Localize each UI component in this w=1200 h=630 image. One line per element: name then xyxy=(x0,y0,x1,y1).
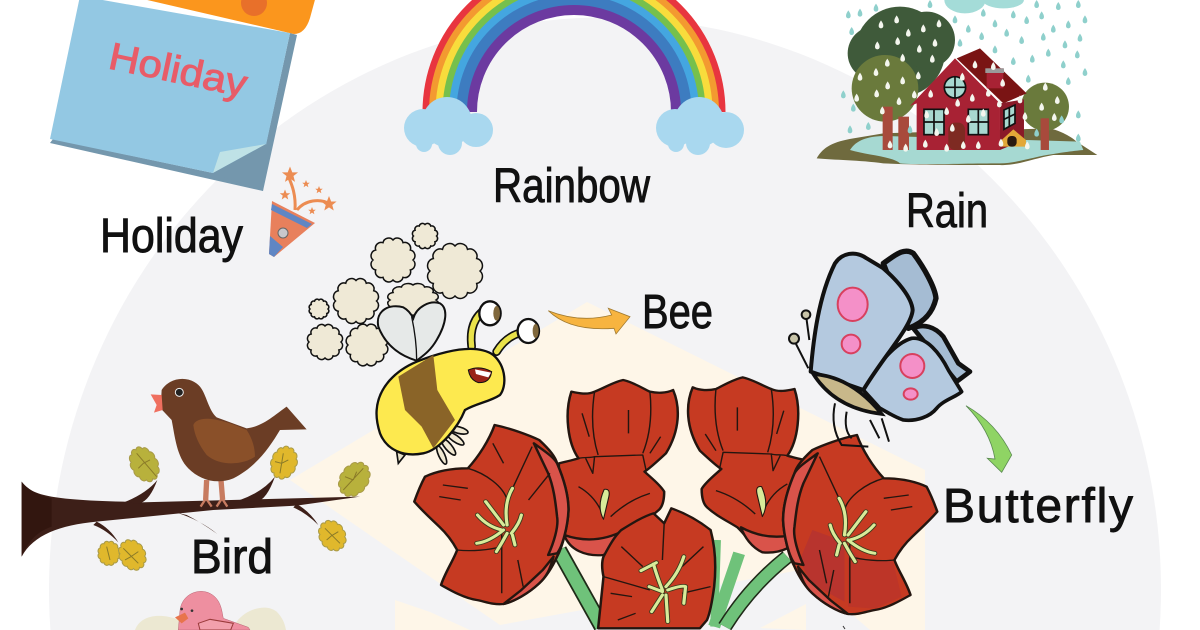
icon: party popper xyxy=(269,166,337,257)
small mark xyxy=(843,626,845,629)
label: Rainbow: Rainbow xyxy=(493,160,650,213)
illustration: bee xyxy=(376,301,539,465)
illustration: pollen puffs xyxy=(307,223,482,366)
calendar lettering: Holiday xyxy=(105,36,251,106)
label: Bee: Bee xyxy=(642,286,713,339)
icon: right cloud xyxy=(656,97,744,155)
label: Bird: Bird xyxy=(191,531,273,584)
label: Rain: Rain xyxy=(906,185,988,238)
flower: left tulip xyxy=(559,380,678,555)
label: Holiday: Holiday xyxy=(100,210,243,263)
icon: left cloud xyxy=(404,97,493,155)
illustration: bird on branch xyxy=(22,379,376,575)
illustration: rain and house xyxy=(817,0,1097,165)
flower: center bloom xyxy=(598,508,715,628)
arrow: to Butterfly xyxy=(966,406,1012,472)
illustration: pink bird xyxy=(135,591,286,630)
illustration: rainbow xyxy=(426,0,722,112)
label: Butterfly: Butterfly xyxy=(943,480,1133,533)
arrow: to Bee xyxy=(548,308,630,334)
illustration: flower bouquet xyxy=(414,377,937,628)
illustration: calendar xyxy=(50,0,316,191)
flower: left bloom xyxy=(414,425,569,604)
flower: right bloom xyxy=(783,435,937,614)
cream hexagon backdrop xyxy=(290,302,925,630)
illustration: butterfly xyxy=(789,251,970,447)
flower stems xyxy=(559,540,787,627)
flower: right tulip xyxy=(688,377,807,553)
